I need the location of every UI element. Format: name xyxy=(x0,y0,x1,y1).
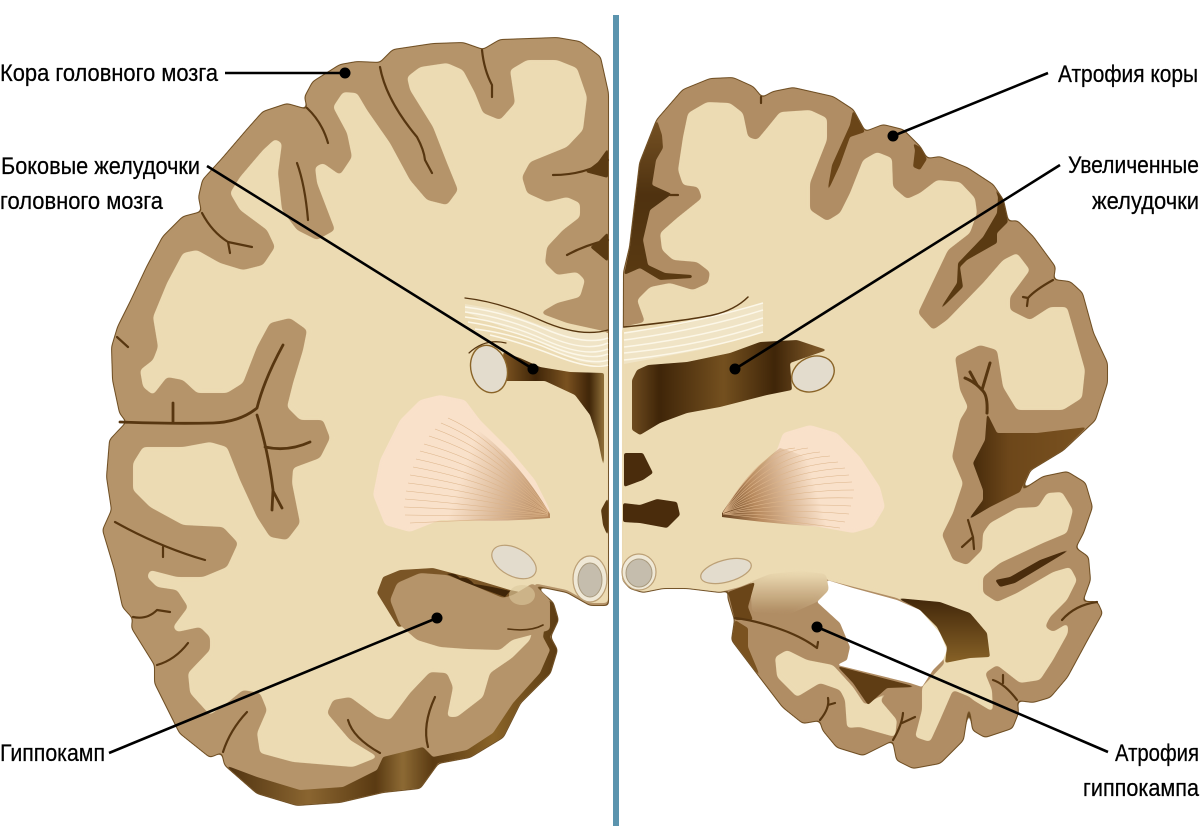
right sulci xyxy=(670,97,1097,740)
right dark shading outer cortex xyxy=(624,110,1008,312)
label: cortical atrophy xyxy=(888,61,1198,142)
label: hippocampus xyxy=(0,612,442,767)
label: lateral ventricles: Боковые желудочки xyxy=(1,153,200,180)
left dark outer cortex shading xyxy=(225,592,558,805)
label: lateral ventricles: головного мозга xyxy=(0,188,164,215)
left putamen fan xyxy=(373,395,550,532)
left medial dark spot xyxy=(601,497,608,537)
left cortex outline xyxy=(103,38,608,805)
right optic tract ellipse xyxy=(698,554,754,588)
label: lateral ventricles xyxy=(0,153,538,374)
right lower white matter lobes xyxy=(775,650,897,737)
label: hippocampal atrophy xyxy=(812,622,1200,802)
label: cortex xyxy=(0,60,350,87)
left optic tract ellipse xyxy=(486,538,542,586)
right large sulcus dark area xyxy=(968,413,1096,520)
left sulci xyxy=(115,50,608,753)
right white matter xyxy=(622,102,1085,742)
left hippocampus xyxy=(377,568,550,650)
label: hippocampus: Гиппокамп xyxy=(0,740,105,767)
left mammillary body xyxy=(573,556,607,602)
right atrophy cavity xyxy=(817,580,947,687)
right enlarged ventricle xyxy=(632,340,840,435)
right hippocampus xyxy=(728,571,829,707)
left lateral ventricle xyxy=(465,341,604,470)
label: enlarged ventricles xyxy=(730,152,1199,374)
right lower dark wedge xyxy=(837,666,917,705)
right putamen fan xyxy=(722,425,885,533)
right third ventricle fragments xyxy=(623,453,680,528)
right enlarged temporal horn xyxy=(897,598,990,663)
left hemisphere: healthy brain xyxy=(103,38,608,805)
left white matter xyxy=(133,60,608,767)
right cortex outline xyxy=(623,78,1107,768)
right corpus callosum fibres xyxy=(624,297,763,364)
right hemisphere: atrophied brain xyxy=(622,78,1107,768)
left corpus callosum fibres xyxy=(465,298,608,366)
right mammillary body xyxy=(622,554,656,590)
label: cortex: Кора головного мозга xyxy=(0,60,219,87)
central dividing line xyxy=(613,15,619,826)
